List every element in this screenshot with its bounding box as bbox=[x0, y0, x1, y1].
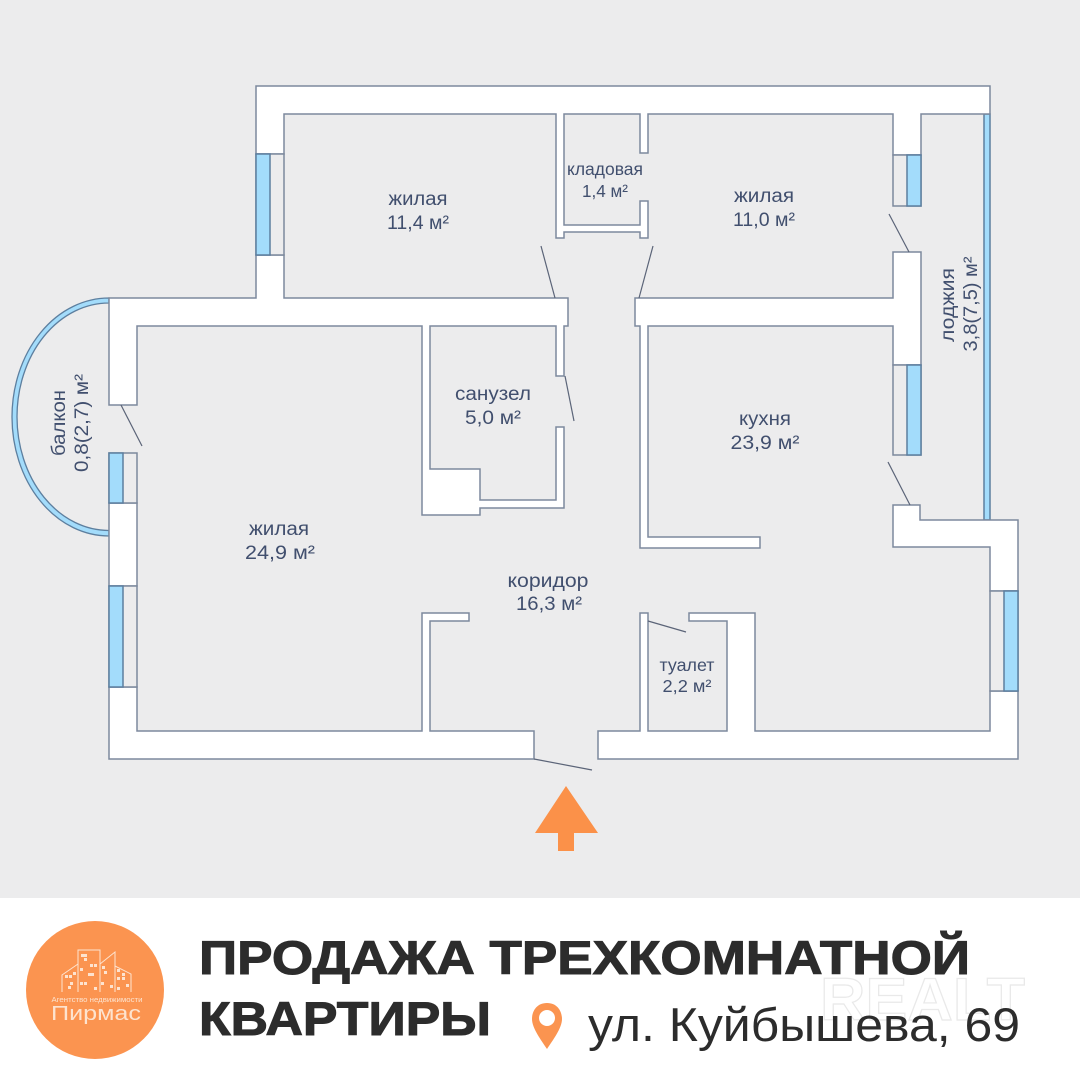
label: loggia: лоджия bbox=[938, 268, 959, 342]
label: storage: 1,4 м² bbox=[582, 181, 628, 201]
label: toilet: 2,2 м² bbox=[662, 676, 712, 696]
label: corridor: 16,3 м² bbox=[516, 594, 582, 615]
title bbox=[199, 931, 970, 1045]
title line 2: КВАРТИРЫ bbox=[199, 992, 491, 1045]
door swings bbox=[121, 214, 910, 770]
window: balcony door side bbox=[109, 453, 137, 503]
window: upper right room bbox=[893, 155, 921, 206]
title line 1: ПРОДАЖА ТРЕХКОМНАТНОЙ bbox=[199, 931, 970, 984]
label: living room 11.0: жилая bbox=[734, 186, 794, 207]
label: bathroom: санузел bbox=[455, 384, 531, 405]
label: living room 11.4: 11,4 м² bbox=[387, 213, 449, 234]
logo buildings bbox=[62, 950, 131, 992]
logo bbox=[26, 921, 164, 1059]
label: living room 24.9: 24,9 м² bbox=[245, 543, 315, 564]
label: bathroom bbox=[455, 384, 531, 429]
floor plan bbox=[12, 86, 1018, 851]
walls: central horizontal and bathroom bbox=[109, 255, 568, 515]
panel: footer background bbox=[0, 898, 1080, 1080]
logo tagline: Агентство недвижимости bbox=[52, 995, 142, 1004]
label: corridor: коридор bbox=[508, 571, 588, 592]
label: kitchen bbox=[730, 409, 800, 454]
label: balcony: 0,8(2,7) м² bbox=[72, 374, 93, 472]
loggia glazing bbox=[984, 114, 990, 520]
label: living room 24.9 bbox=[245, 519, 315, 564]
label: living room 11.4 bbox=[387, 189, 449, 234]
balcony curved glazing bbox=[12, 298, 109, 536]
label: living room 11.0 bbox=[733, 186, 795, 231]
logo name: Пирмас bbox=[51, 1003, 141, 1025]
window: upper left bbox=[256, 154, 284, 255]
walls: bottom left bbox=[109, 613, 534, 759]
address: ул. Куйбышева, 69 bbox=[588, 998, 1020, 1051]
logo circle bbox=[26, 921, 164, 1059]
label: balcony bbox=[49, 374, 93, 472]
label: storage: кладовая bbox=[567, 159, 643, 179]
label: toilet bbox=[660, 655, 714, 696]
label: kitchen: кухня bbox=[739, 409, 791, 430]
walls: left pier bbox=[109, 503, 137, 586]
label: living room 11.0: 11,0 м² bbox=[733, 210, 795, 231]
window: kitchen right bbox=[990, 591, 1018, 691]
watermark: REALT bbox=[820, 966, 1025, 1033]
label: bathroom: 5,0 м² bbox=[465, 408, 521, 429]
label: toilet: туалет bbox=[660, 655, 714, 675]
window: lower left bbox=[109, 586, 137, 687]
window: kitchen to loggia bbox=[893, 365, 921, 455]
label: corridor bbox=[508, 571, 588, 615]
label: loggia bbox=[938, 256, 982, 352]
label: living room 11.4: жилая bbox=[388, 189, 448, 210]
label: living room 24.9: жилая bbox=[249, 519, 309, 540]
arrow: entrance bbox=[535, 786, 598, 851]
label: balcony: балкон bbox=[49, 390, 70, 456]
walls: upper and central bbox=[256, 86, 990, 238]
label: kitchen: 23,9 м² bbox=[730, 433, 800, 454]
walls: kitchen right corner bbox=[893, 505, 1018, 591]
label: storage bbox=[567, 159, 643, 201]
label: loggia: 3,8(7,5) м² bbox=[961, 256, 982, 352]
logo windows bbox=[65, 954, 129, 990]
walls: kitchen partition bbox=[635, 252, 921, 548]
icon: location pin bbox=[532, 1003, 562, 1049]
walls: bottom right bbox=[598, 613, 1018, 759]
